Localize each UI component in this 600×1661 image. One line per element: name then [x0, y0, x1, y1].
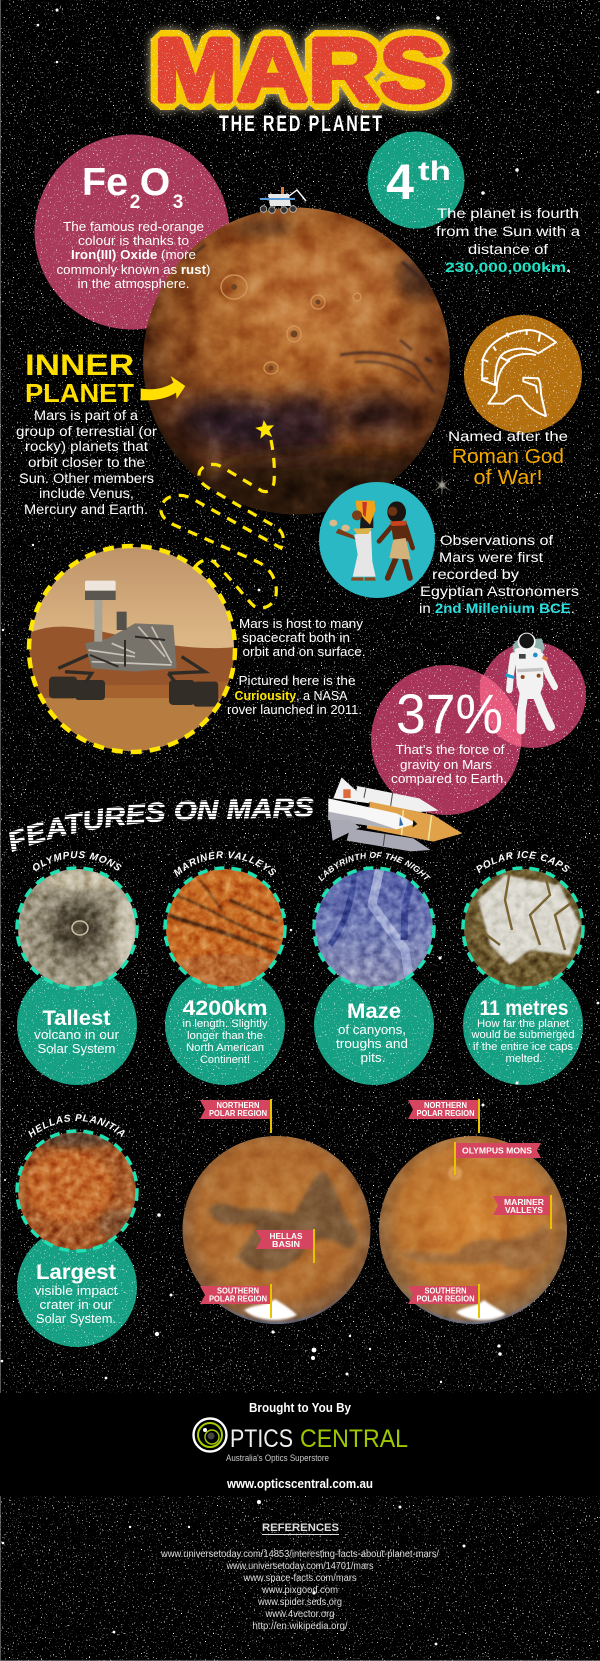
text: Egyptian observations: in 2nd Millenium BCE .	[419, 601, 575, 616]
fact text: melted.	[506, 1053, 542, 1065]
flag: Hellas Basin: HELLAS	[270, 1232, 303, 1241]
title subtitle: THE RED PLANET: THE RED PLANET	[219, 111, 382, 137]
heading: INNER PLANET: PLANET	[25, 378, 134, 408]
man	[379, 501, 413, 578]
panel: inner planet: orbit closer to the	[28, 455, 145, 470]
label: Mariner Valleys: MARINER VALLEYS	[174, 851, 276, 877]
panel: Polar Ice Caps	[461, 851, 585, 1065]
fact text: Solar System	[38, 1042, 115, 1056]
heading: 4th	[386, 154, 451, 210]
circle: 37% background	[371, 665, 521, 815]
flag: northern polar region (right)	[408, 1099, 480, 1133]
panel: Labyrinth of the Night	[312, 852, 436, 1065]
label: Polar Ice Caps: POLAR ICE CAPS	[476, 851, 570, 874]
overlap lens of gravity circles	[480, 674, 521, 747]
logo: Optics Central: CENTRAL	[300, 1425, 408, 1453]
fact text: of canyons,	[338, 1023, 406, 1037]
text: Named after Roman God of War: of War!	[474, 467, 542, 489]
panel: 4th planet: from the Sun with a	[436, 224, 581, 239]
flag: northern polar region (left): POLAR REGION	[209, 1109, 267, 1118]
fact text	[182, 997, 268, 1066]
panel: inner planet: Mercury and Earth.	[24, 502, 148, 517]
fact text	[470, 997, 574, 1065]
circle: helmet background	[464, 315, 582, 433]
text: spacecraft on Mars: Mars is host to many	[239, 617, 364, 631]
fact text: crater in our	[40, 1298, 112, 1312]
fact text: volcano in our	[34, 1028, 119, 1042]
fact text: would be submerged	[470, 1029, 574, 1041]
stat: 37% gravity	[391, 682, 507, 786]
panel: Fe2O3 text: Iron(III) Oxide (more	[71, 248, 196, 262]
panel: Fe2O3 text	[56, 161, 210, 291]
fact text: North American	[186, 1042, 264, 1054]
flag: Olympus Mons	[454, 1142, 541, 1175]
green circles for feature facts	[17, 965, 583, 1347]
circle: Fe2O3 background	[34, 134, 230, 330]
heading: 4th: th	[418, 156, 451, 186]
heading: Features on Mars: FEATURES ON MARS	[9, 797, 314, 852]
flag: Mariner Valleys: VALLEYS	[505, 1206, 544, 1215]
image: Hellas Planitia	[17, 1127, 142, 1251]
heading: INNER PLANET	[25, 349, 134, 408]
panel: 4th planet: distance of	[468, 242, 548, 257]
heading: Fe2O3 formula: 2	[130, 192, 140, 213]
flag: southern polar region (right)	[408, 1284, 480, 1318]
panel: inner planet: group of terrestial (or	[16, 424, 158, 439]
arrow: inner planet to Mars	[141, 376, 185, 400]
text: spacecraft on Mars: Pictured here is the	[238, 674, 356, 688]
title: MARS: MARS	[154, 21, 446, 121]
heading: 4th: 4	[386, 154, 414, 210]
fact text: longer than the	[187, 1030, 263, 1042]
label: Olympus Mons: OLYMPUS MONS	[33, 851, 122, 871]
flag: southern polar region (right): SOUTHERN	[424, 1286, 467, 1296]
flag: northern polar region (left): NORTHERN	[216, 1101, 260, 1110]
fact text: Largest	[36, 1261, 116, 1284]
circle: astronaut background	[480, 642, 586, 748]
woman	[329, 501, 376, 581]
list: reference links: www.space-facts.com/mars	[243, 1573, 356, 1584]
list: reference links: www.pixgood.com	[261, 1585, 338, 1596]
heading: Fe2O3 formula: Fe	[82, 161, 128, 204]
text: spacecraft on Mars: Curiousity, a NASA	[234, 689, 348, 703]
list: reference links: www.spider.seds.org	[257, 1597, 342, 1608]
panel: Fe2O3 text: colour is thanks to	[78, 234, 189, 248]
panel: inner planet: rocky) planets that	[25, 439, 148, 454]
flag: Mariner Valleys: MARINER	[504, 1198, 544, 1207]
label: Hellas Planitia: HELLAS PLANITIA	[28, 1114, 125, 1138]
planet: Mars main globe	[143, 208, 450, 514]
stat: 37% gravity: That's the force of	[396, 743, 505, 757]
list: reference links: www.4vector.org	[265, 1609, 334, 1620]
flag: southern polar region (right): POLAR REGION	[416, 1294, 475, 1304]
flag: northern polar region (right): POLAR REGION	[416, 1109, 475, 1118]
logo: Optics Central	[194, 1418, 408, 1463]
text: Brought to You By: Brought to You By	[249, 1400, 352, 1415]
text: Named after Roman God of War: Named after the	[448, 429, 568, 444]
icon: Spartan helmet	[482, 330, 556, 416]
panel: Olympus Mons	[15, 851, 139, 1056]
image: Polar Ice Caps	[463, 868, 583, 988]
fact text: How far the planet	[477, 1018, 569, 1030]
heading: Fe2O3 formula: 3	[173, 192, 183, 213]
icon: space shuttle	[328, 777, 462, 851]
panel: Fe2O3 text: commonly known as rust)	[56, 263, 210, 277]
icon: astronaut	[505, 633, 555, 730]
stat: 37% gravity: compared to Earth.	[391, 772, 507, 786]
panel: inner planet	[16, 349, 158, 517]
fact text	[34, 1261, 118, 1326]
text: Egyptian observations	[419, 533, 579, 616]
fact text: visible impact	[34, 1284, 118, 1298]
panel: 4th planet: 230,000,000km .	[445, 260, 571, 275]
logo: Optics Central: PTICS	[230, 1425, 293, 1453]
star burst	[433, 474, 452, 497]
list: reference links	[160, 1549, 439, 1632]
list: reference links: www.universetoday.com/14701/mars	[226, 1561, 374, 1572]
fact text	[34, 1007, 119, 1056]
title: MARS: MARS	[154, 21, 446, 121]
panel: 4th planet: The planet is fourth	[437, 206, 579, 221]
fact text: if the entire ice caps	[473, 1041, 573, 1053]
text: Egyptian observations: recorded by	[432, 567, 519, 582]
fact text: Maze	[347, 1000, 401, 1023]
fact text	[336, 1000, 408, 1065]
text: website: www.opticscentral.com.au	[226, 1476, 373, 1491]
heading: Fe2O3 formula: O	[140, 161, 170, 204]
flag: southern polar region (left)	[200, 1284, 272, 1318]
logo: Optics Central: Australia's Optics Superstore	[226, 1453, 329, 1463]
path: dashed rover trail	[161, 440, 283, 608]
fact text: pits.	[360, 1051, 386, 1065]
planet: right Mars globe	[378, 1136, 568, 1324]
flag: Mariner Valleys	[493, 1195, 552, 1229]
fact text: Solar System.	[36, 1312, 116, 1326]
text: spacecraft on Mars: rover launched in 2011.	[227, 703, 362, 717]
list: reference links: www.universetoday.com/14853/interesting-facts-about-planet-mars/	[160, 1549, 439, 1560]
fact text: Tallest	[42, 1007, 111, 1030]
circle: 4th background	[368, 132, 464, 228]
flag: Olympus Mons: OLYMPUS MONS	[462, 1146, 533, 1156]
text: Named after Roman God of War	[448, 429, 568, 489]
image: Curiosity rover	[29, 545, 235, 754]
flag: northern polar region (left)	[200, 1099, 272, 1133]
planet: left Mars globe	[182, 1136, 371, 1324]
list: reference links: http://en.wikipedia.org/	[252, 1621, 348, 1632]
panel: inner planet: Mars is part of a	[34, 408, 139, 423]
flag: Hellas Basin: BASIN	[272, 1240, 300, 1249]
text: Egyptian observations: Observations of	[440, 533, 553, 548]
panel: 4th planet	[386, 154, 581, 275]
text: Egyptian observations: Mars were first	[439, 550, 543, 565]
stat: 37% gravity: gravity on Mars	[400, 758, 492, 772]
icon: Egyptian astronomers	[319, 482, 435, 598]
image: Olympus Mons	[17, 868, 140, 988]
flag: southern polar region (left): SOUTHERN	[217, 1286, 259, 1296]
panel: inner planet: include Venus,	[39, 486, 134, 501]
panel: footer band	[0, 1393, 600, 1496]
image: Mariner Valleys	[165, 868, 285, 988]
panel: Hellas Planitia	[15, 1114, 139, 1326]
heading: Fe2O3 formula	[82, 161, 183, 213]
text: spacecraft on Mars: orbit and on surface.	[242, 645, 366, 659]
flag: Hellas Basin	[256, 1229, 315, 1263]
fact text: Continent!	[200, 1054, 250, 1066]
image: Labyrinth	[314, 868, 434, 988]
label: Labyrinth of the Night: LABYRINTH OF THE NIGHT	[318, 852, 431, 882]
flag: southern polar region (left): POLAR REGION	[209, 1294, 267, 1304]
fact text: troughs and	[336, 1037, 408, 1051]
panel: Fe2O3 text: The famous red-orange	[63, 220, 204, 234]
panel: Fe2O3 text: in the atmosphere.	[78, 277, 190, 291]
stat: 37% gravity: 37%	[396, 682, 503, 745]
icon: star marker	[254, 419, 276, 439]
text: Named after Roman God of War: Roman God	[452, 446, 564, 468]
heading: references: REFERENCES	[262, 1522, 339, 1534]
surface: volcanoes	[221, 275, 361, 374]
text: spacecraft on Mars: spacecraft both in	[242, 631, 350, 645]
fact text: in length. Slightly	[182, 1018, 268, 1030]
heading: INNER PLANET: INNER	[25, 349, 134, 382]
flag: northern polar region (right): NORTHERN	[424, 1101, 467, 1110]
icon: small rover on planet	[260, 187, 306, 213]
text: Egyptian observations: Egyptian Astronomers	[420, 584, 579, 599]
text: spacecraft on Mars	[227, 617, 366, 717]
panel: Mariner Valleys	[163, 851, 287, 1066]
fact text: 11 metres	[480, 997, 568, 1020]
fact text: 4200km	[182, 997, 268, 1020]
surface: Valles Marineris	[190, 245, 434, 392]
icon: lens	[194, 1418, 226, 1452]
panel: inner planet: Sun. Other members	[19, 471, 154, 486]
